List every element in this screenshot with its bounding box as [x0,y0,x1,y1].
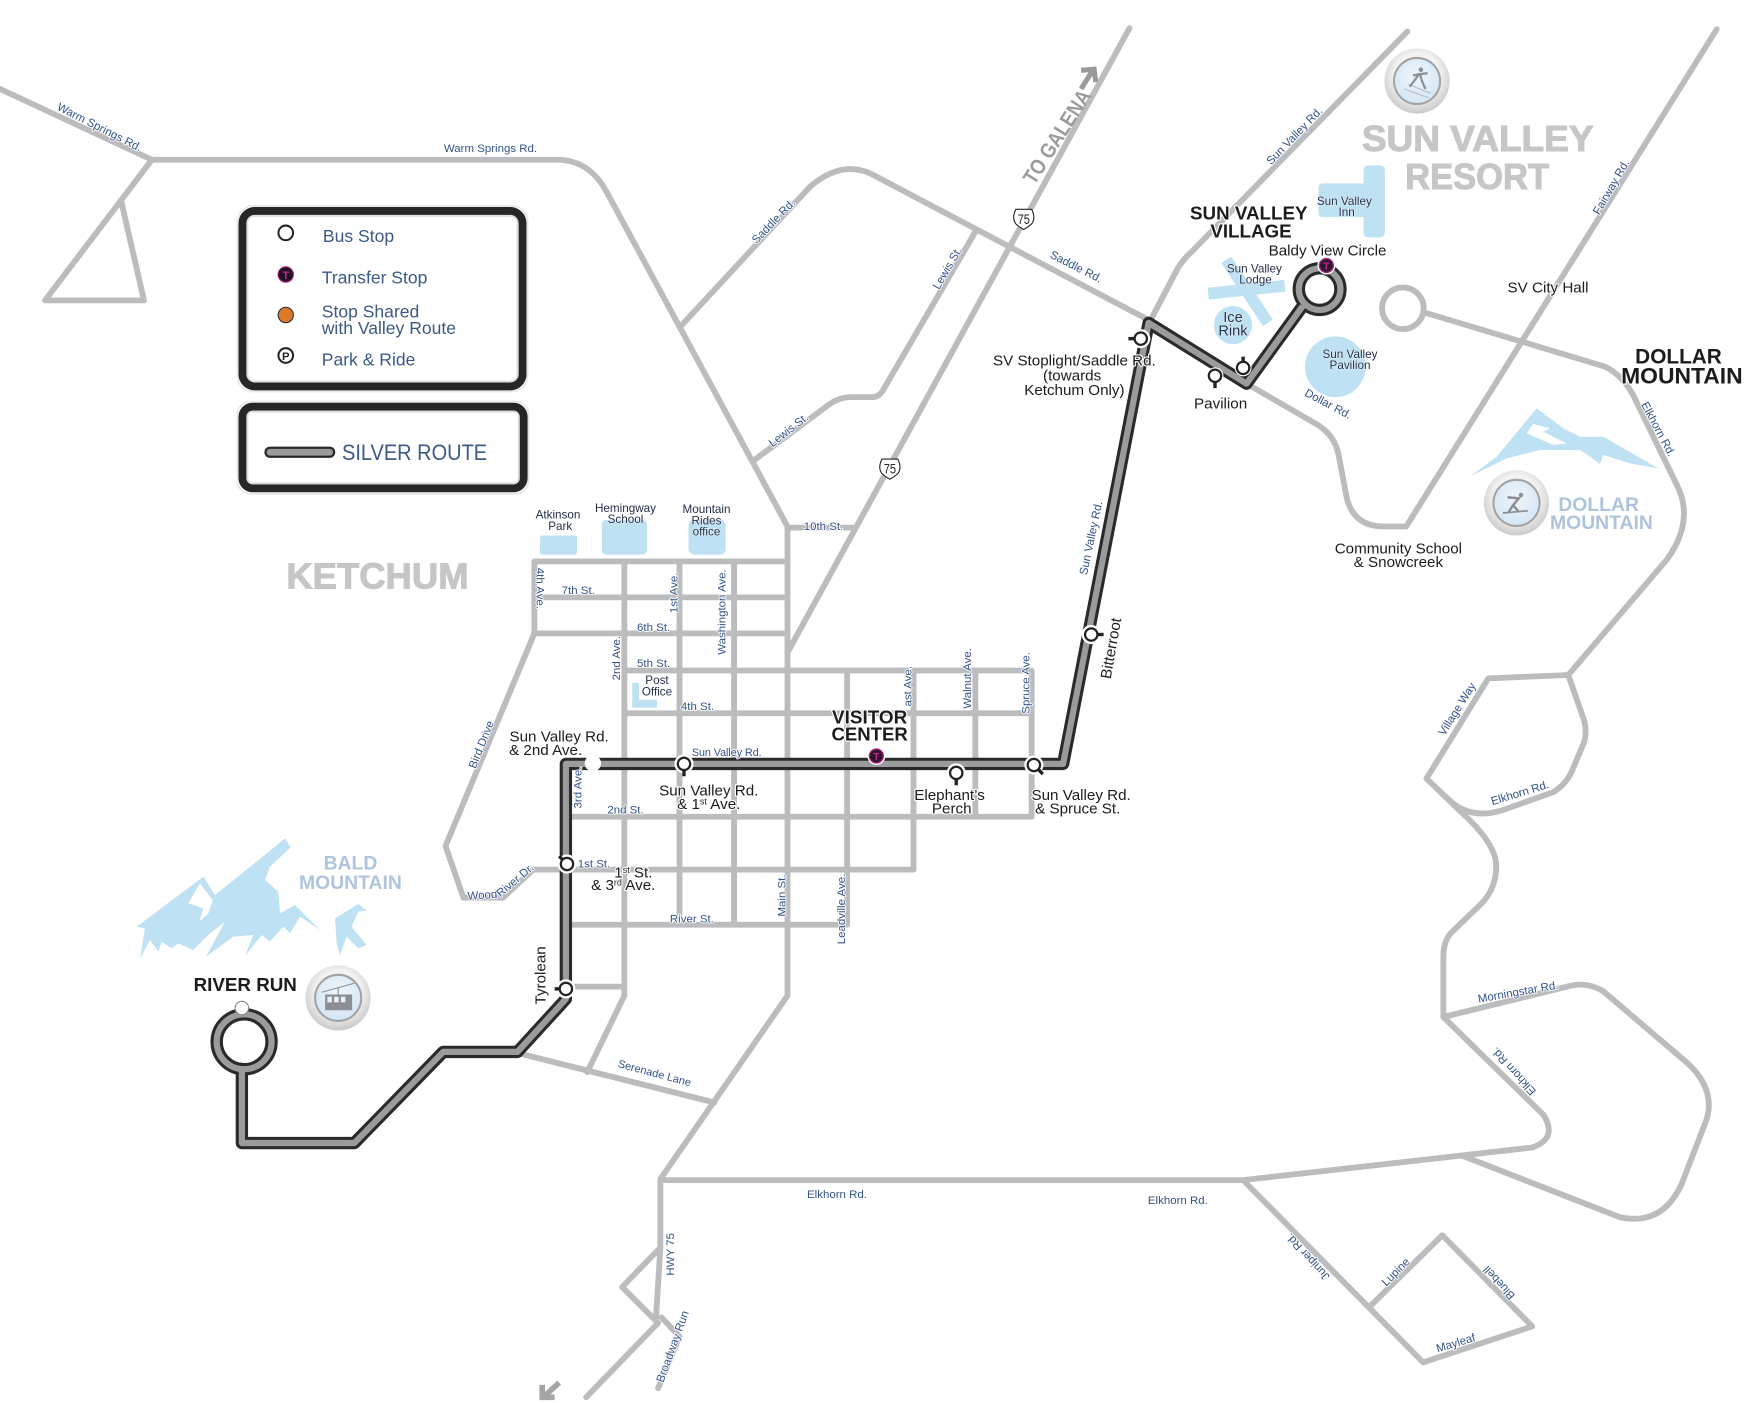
label: Mountain Rides office: office [693,526,720,539]
label: Sun Valley Rd and 1st Ave: Sun Valley Rd. [659,782,758,799]
label: Sun Valley Rd and Spruce St [1032,787,1131,817]
label: Atkinson Park: Park [548,520,572,533]
stop: 1st St and 3rd Ave [557,854,577,874]
area: Ice Rink [1214,306,1252,344]
label: 2nd Ave: 2nd Ave. [611,636,623,680]
heading: Sun Valley Village [1190,202,1308,241]
road: Bird Drive and Wood River Dr [446,633,534,898]
label: 4th St: 4th St. [681,701,714,713]
route: Silver Route line [217,268,1340,1143]
label: Sun Valley Rd and 1st Ave: Ave. [707,796,740,813]
label: Elephant's Perch [914,787,985,817]
label: Mountain Rides office: Rides [692,514,722,527]
shield: US 75 south: 75 [884,461,896,477]
stop: Visitor Center transfer: T [873,752,880,763]
label: 7th St: 7th St. [562,585,595,597]
label: Wood River Dr: Wood [467,889,498,903]
label: Ice Rink: Rink [1218,323,1248,339]
label: Post Office: Office [642,685,672,698]
label: Baldy View Circle: Baldy View Circle [1269,242,1386,259]
label: Lupine: Lupine [1380,1256,1413,1289]
road: Dollar Rd and Fairway Rd [1246,29,1717,527]
stop: SV Stoplight [1128,329,1150,348]
place areas: light-blue building footprints [540,165,1385,708]
label: 1st St and 3rd Ave: St. [630,865,652,882]
label: SV Stoplight: SV Stoplight/Saddle Rd. [993,353,1156,370]
label: 5th St: 5th St. [637,658,670,670]
stop: Sun Valley Rd and 1st Ave [674,754,694,776]
label: Warm Springs Rd: Warm Springs Rd. [444,143,537,155]
label: 10th St: 10th St. [804,521,843,533]
label: Fairway Rd: Fairway Rd. [1591,158,1632,217]
label: Warm Springs Rd diagonal: Warm Springs Rd. [55,101,144,154]
panel: route key [237,402,529,494]
stop: Sun Valley Rd and 2nd Ave [586,756,600,771]
heading: Visitor Center: VISITOR [832,707,908,728]
icon: arrow south [542,1383,559,1397]
road: Elkhorn Rd south [660,1017,1549,1180]
road: HWY 75 south loop [586,1248,680,1397]
road: Morningstar Rd [1443,985,1709,1219]
label: 1st St and 3rd Ave [591,865,655,894]
shield: US 75 south [880,459,900,479]
legend: stop shared with Valley Route: with Valley Route [321,318,456,338]
label: Sun Valley Rd north: Sun Valley Rd. [1265,105,1325,167]
label: Juniper Rd: Juniper Rd. [1284,1231,1332,1282]
icon: Sun Valley skier badge [1384,48,1450,114]
heading: Ketchum: KETCHUM [286,555,469,596]
label: HWY 75: HWY 75 [665,1233,677,1276]
label: Leadville Ave: Leadville Ave. [836,874,848,944]
stops along the route [235,257,1335,1015]
road: Warm Springs and Main [0,89,788,1320]
label: Ice Rink: Ice [1223,310,1243,326]
road: Serenade Lane [518,996,714,1103]
label: Sun Valley Rd and 2nd Ave: Sun Valley Rd. [510,728,609,745]
heading: Sun Valley Resort: SUN VALLEY [1362,118,1594,159]
heading: Dollar Mountain stop: DOLLAR [1635,345,1722,368]
stop: Pavilion opposite [1235,357,1252,376]
area: Post Office [632,683,657,708]
legend: park and ride [278,348,415,370]
label: 1st St and 3rd Ave: rd [614,877,622,887]
icon: gondola badge [306,965,371,1031]
road: Lewis St [753,232,975,461]
label: 1st St and 3rd Ave: st [623,865,630,875]
label: To Galena: TO GALENA [1018,85,1096,188]
area: Mountain Rides office [688,520,726,555]
label: Sun Valley Inn: Inn [1339,206,1355,219]
heading: Sun Valley Resort: RESORT [1405,156,1549,197]
area: Sun Valley Lodge [1208,260,1285,323]
label: Sun Valley Rd and 1st Ave [659,782,758,813]
icon: arrow to Galena [1081,69,1096,89]
stop: Bitterroot [1082,625,1104,644]
stop: Pavilion [1207,367,1223,388]
label: Post Office: Post [645,674,669,687]
stop: Baldy View Circle transfer: T [1323,261,1330,272]
heading: Sun Valley Resort [1362,118,1594,197]
label: SV Stoplight: Ketchum Only) [1024,382,1125,399]
label: Community School [1335,541,1462,571]
label: Sun Valley Rd and Spruce St: & Spruce St. [1035,800,1120,817]
label: Bird Drive: Bird Drive [467,719,497,770]
label: Lewis St north: Lewis St. [931,245,965,292]
label: Sun Valley Inn: Sun Valley [1317,195,1372,208]
label: Sun Valley Rd and Spruce St: Sun Valley Rd. [1032,787,1131,804]
label: Sun Valley Rd east: Sun Valley Rd. [1078,500,1105,576]
heading: Visitor Center [831,707,908,744]
label: Pavilion: Pavilion [1194,395,1247,412]
route key sample line [270,447,330,457]
label: Wood River Dr: River Dr. [495,862,537,900]
label: Atkinson Park [536,509,580,533]
heading: Sun Valley Village: SUN VALLEY [1190,202,1308,223]
label: River St: River St. [670,914,714,926]
legend: stop shared with Valley Route [278,301,456,338]
legend: transfer stop: T [282,270,289,282]
stop: Sun Valley Rd and Spruce St [1024,755,1043,775]
legend: park and ride: Park & Ride [322,350,415,370]
label: Tyrolean: Tyrolean [533,946,550,1004]
label: 3rd Ave: 3rd Ave. [573,767,585,808]
label: Saddle Rd east: Saddle Rd. [1048,249,1104,286]
road: Dollar Mountain loop [1382,287,1424,329]
label: 6th St: 6th St. [637,622,670,634]
road: Elkhorn Rd east [1425,313,1684,675]
label: Lewis St south: Lewis St. [767,412,811,450]
stop: River Run [235,1001,249,1015]
legend: transfer stop [278,267,428,288]
label: Main St: Main St. [776,874,788,917]
road: 10th St [788,525,855,530]
label: Village Way: Village Way [1437,681,1479,738]
label: Elkhorn Rd south west: Elkhorn Rd. [807,1189,867,1201]
label: Sun Valley Rd town: Sun Valley Rd. [692,747,762,759]
heading: Dollar Mountain stop: MOUNTAIN [1621,364,1743,389]
label: Hemingway School: School [608,513,643,526]
label: SV Stoplight: (towards [1043,367,1102,384]
road: Warm Springs triangle [45,160,152,300]
label: Saddle Rd west: Saddle Rd. [750,197,798,246]
legend: stop shared with Valley Route: Stop Shared [322,301,419,321]
label: Wood River Dr [467,862,537,903]
label: Sun Valley Lodge: Sun Valley [1227,262,1282,275]
heading: Dollar Mountain stop [1621,345,1743,389]
label: Elkhorn Rd reversed: Elkhorn Rd. [1490,1044,1539,1097]
heading: Sun Valley Village: VILLAGE [1210,220,1292,241]
heading: Dollar Mountain area [1550,494,1653,534]
illustration: Bald Mountain [137,838,367,958]
area: Atkinson Park [540,536,577,555]
label: Sun Valley Pavilion [1322,348,1378,372]
label: Sun Valley Pavilion: Sun Valley [1322,348,1378,361]
illustration: Dollar Mountain [1471,408,1658,476]
shield: US 75 north: 75 [1018,211,1030,227]
label: 4th Ave: 4th Ave. [534,568,546,609]
stop names [509,242,1588,1004]
label: 1st St and 3rd Ave: Ave. [622,877,655,894]
label: Community School: & Snowcreek [1354,554,1443,571]
panel: legend [237,206,528,392]
area: Hemingway School [602,520,647,555]
place names [536,195,1378,698]
label: 1st St and 3rd Ave: 1 [614,865,623,882]
label: East Ave, clipped by Visitor Center heading: ast Ave. [902,666,914,707]
heading: Bald Mountain area: MOUNTAIN [299,872,402,894]
route key label: SILVER ROUTE [342,440,487,465]
icon: snowboarder badge [1484,470,1549,536]
label: 2nd St: 2nd St. [607,804,644,816]
label: Sun Valley Pavilion: Pavilion [1330,359,1370,372]
heading: Dollar Mountain area: MOUNTAIN [1550,512,1653,534]
label: Sun Valley Rd and 1st Ave: & 1 [677,796,700,813]
label: Ice Rink [1218,310,1248,339]
heading: Bald Mountain area: BALD [324,853,377,875]
stop: Elephant's Perch [947,763,966,785]
heading: Visitor Center: CENTER [831,723,908,744]
road: Sun Valley Rd north [1150,32,1407,322]
road: Highway 75 [788,28,1130,653]
label: Hemingway School [595,502,656,526]
road: Elkhorn Rd loop [1446,675,1586,814]
heading: Dollar Mountain area: DOLLAR [1558,494,1639,516]
legend: bus stop: Bus Stop [323,226,394,246]
heading: River Run: RIVER RUN [194,974,297,995]
label: Morningstar Rd: Morningstar Rd. [1477,980,1559,1006]
label: Elephant's Perch: Elephant’s [914,787,985,804]
road: Saddle Rd [682,169,1150,325]
label: Sun Valley Rd and 2nd Ave [509,728,609,759]
label: Sun Valley Rd and 1st Ave: st [700,796,707,806]
stop: Baldy View Circle transfer [1317,257,1335,275]
heading: Bald Mountain area [299,853,402,894]
label: Elkhorn Rd loop: Elkhorn Rd. [1490,779,1551,808]
label: SV City Hall: SV City Hall [1508,280,1588,297]
area: Sun Valley Pavilion [1305,336,1366,397]
label: Atkinson Park: Atkinson [536,509,580,522]
label: Walnut Ave: Walnut Ave. [962,648,974,709]
label: Dollar Rd: Dollar Rd. [1302,387,1353,422]
label: Broadway Run: Broadway Run [655,1309,692,1384]
label: Bluebell: Bluebell [1482,1263,1518,1301]
label: Serenade Lane: Serenade Lane [616,1058,692,1089]
label: Community School: Community School [1335,541,1462,558]
label: Sun Valley Rd and 2nd Ave: & 2nd Ave. [509,742,582,759]
highway shields [880,209,1034,479]
label: 1st Ave: 1st Ave. [668,573,680,613]
label: 1st St: 1st St. [578,858,610,870]
label: Washington Ave: Washington Ave. [717,569,729,655]
label: Sun Valley Lodge: Lodge [1239,274,1272,287]
label: SV Stoplight [993,353,1156,399]
legend: park and ride: P [282,351,290,363]
label: Elkhorn Rd south east: Elkhorn Rd. [1148,1195,1208,1207]
label: Spruce Ave: Spruce Ave. [1020,652,1032,714]
label: Post Office [642,674,672,698]
label: Mountain Rides office [682,503,731,539]
area: Sun Valley Inn [1318,165,1385,237]
street grid [533,561,1032,996]
label: Sun Valley Lodge [1227,262,1282,287]
road: Village Way [1426,675,1568,1017]
legend: transfer stop: Transfer Stop [322,268,428,288]
label: Hemingway School: Hemingway [595,502,656,515]
label: Bitterroot: Bitterroot [1098,616,1125,680]
label: Elkhorn Rd upper: Elkhorn Rd. [1638,400,1677,459]
label: Mountain Rides office: Mountain [682,503,731,516]
legend: bus stop [278,226,394,246]
stop: Visitor Center transfer [867,747,885,765]
shield: US 75 north [1014,209,1034,230]
label: 1st St and 3rd Ave: & 3 [591,877,614,894]
stop: Tyrolean [555,979,575,998]
label: Sun Valley Inn [1317,195,1372,219]
label: Mayleaf: Mayleaf [1435,1332,1478,1355]
road: Juniper loop [1243,1180,1532,1362]
label: Elephant's Perch: Perch [932,800,972,817]
